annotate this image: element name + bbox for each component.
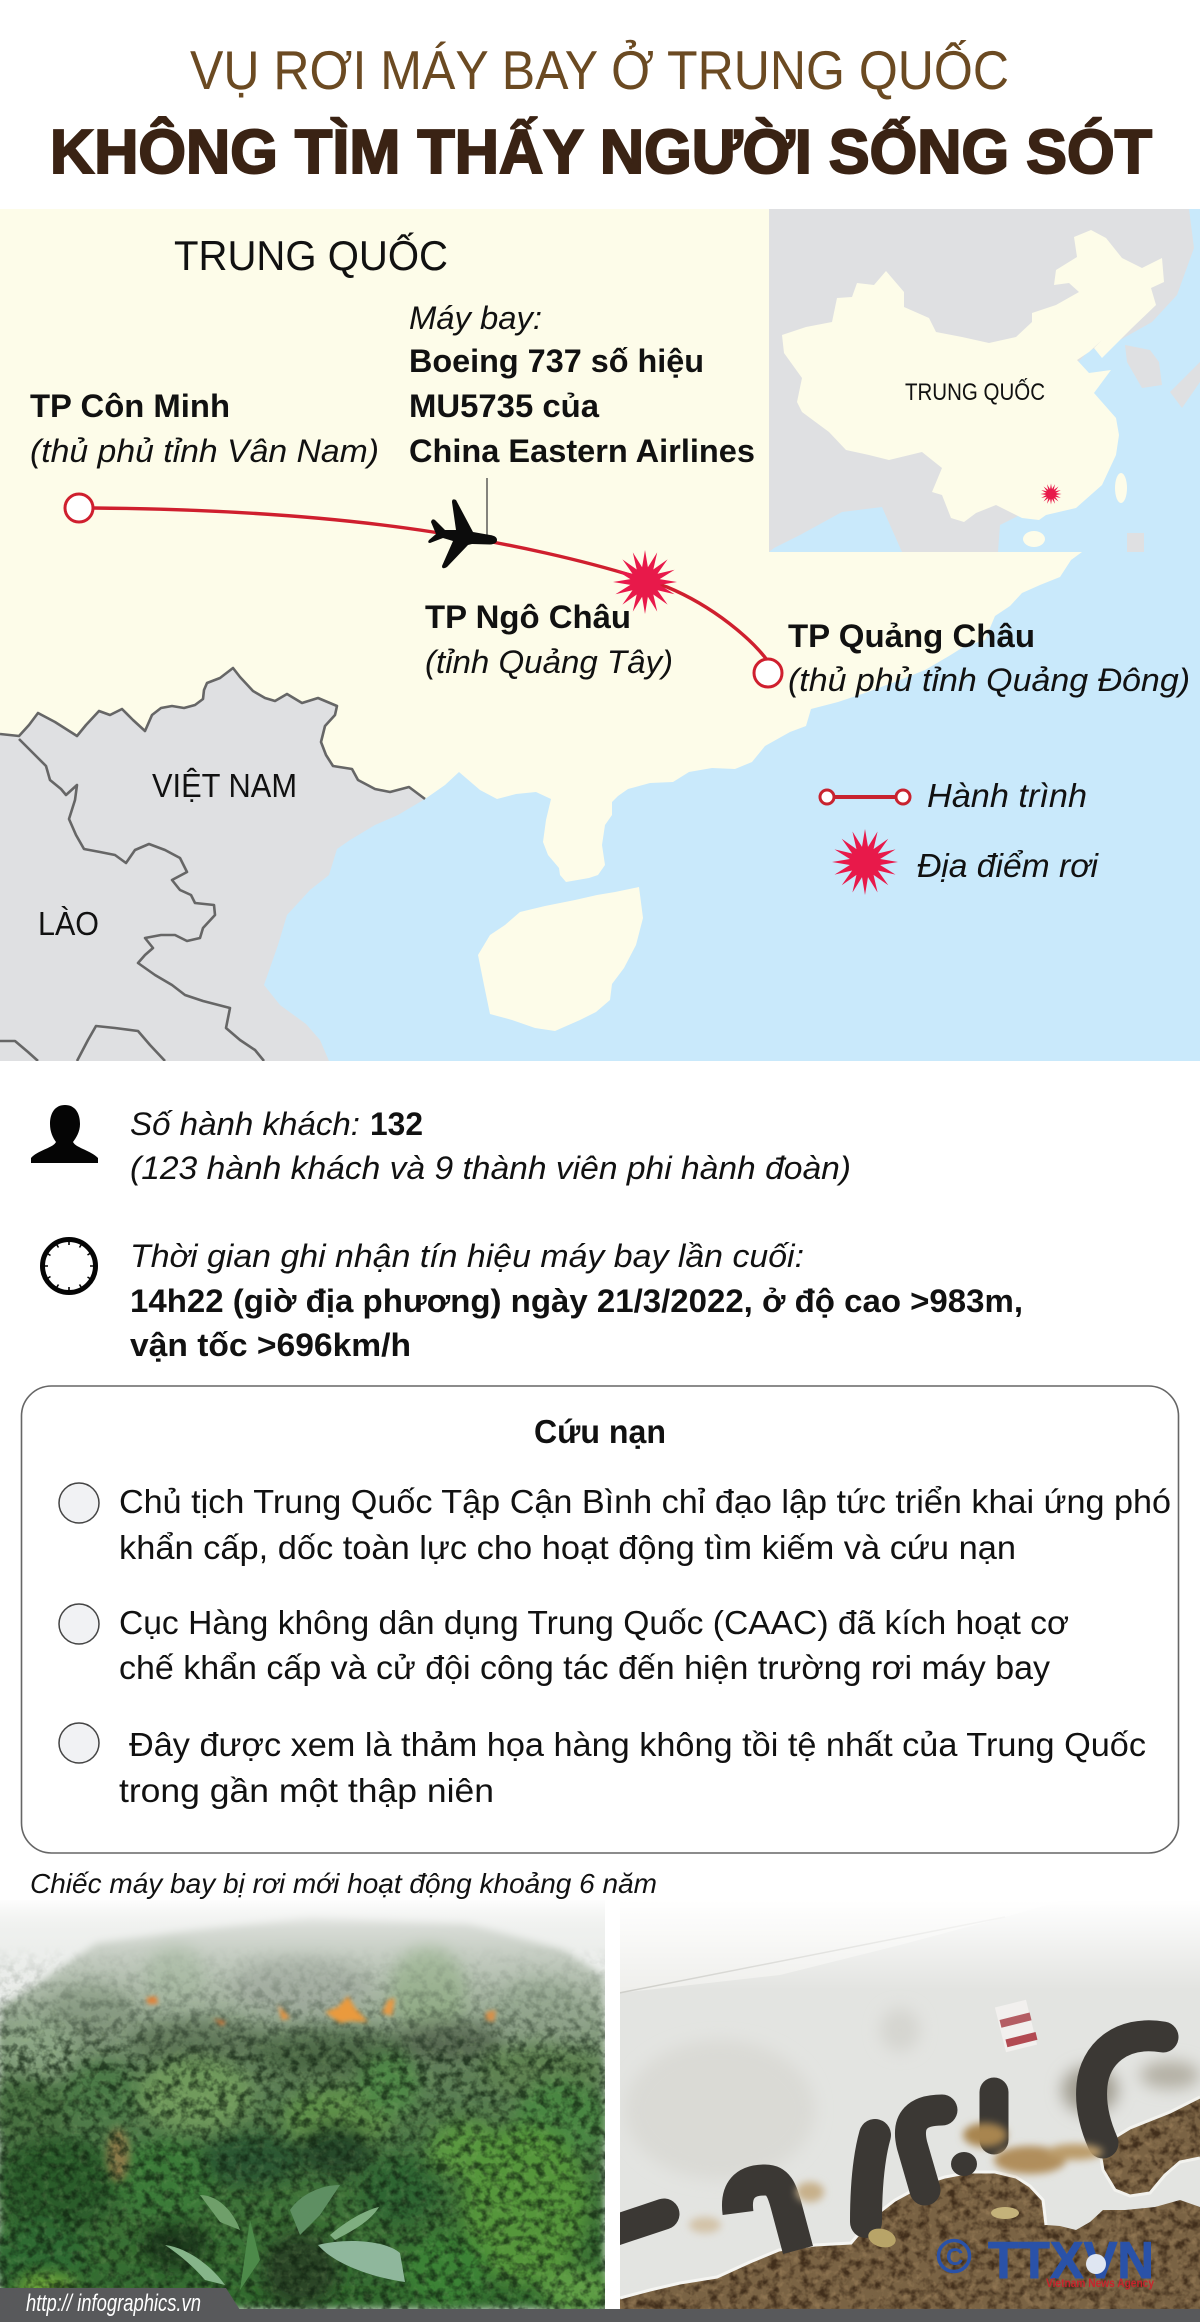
text: Ngô Châu: TP Ngô Châu xyxy=(425,599,631,635)
fuselage panel xyxy=(620,1900,1200,2298)
title line 1: VỤ RƠI MÁY BAY Ở TRUNG QUỐC xyxy=(190,39,1009,101)
logo: TTXVN: TTXVN xyxy=(988,2232,1154,2290)
sticker xyxy=(995,2000,1037,2052)
panel edge highlight xyxy=(620,2172,1046,2298)
item 2: Cục Hàng không dân dụng Trung Quốc (CAAC) đã kích hoạt cơ xyxy=(119,1604,1069,1641)
panel rivet seam xyxy=(619,1917,1005,1993)
label: Việt Nam: VIỆT NAM xyxy=(152,767,297,804)
panel: rescue xyxy=(22,1386,1178,1853)
text: Côn Minh: TP Côn Minh xyxy=(30,388,230,424)
upper panel xyxy=(619,1900,1065,1993)
last signal info xyxy=(42,1238,1023,1363)
title xyxy=(50,39,1152,187)
photo: aircraft wreckage xyxy=(610,1900,1200,2309)
heading: rescue: Cứu nạn xyxy=(534,1413,666,1450)
flight route line xyxy=(93,508,767,660)
leader line xyxy=(486,478,488,536)
signal text: 14h22 (giờ địa phương) ngày 21/3/2022, ở độ cao >983m, xyxy=(130,1283,1023,1319)
rust stains xyxy=(689,2123,1103,2233)
icon: clock xyxy=(42,1240,96,1292)
livery lettering xyxy=(610,2036,1163,2250)
legend: crash site xyxy=(832,829,1100,895)
tree canopies xyxy=(0,1945,611,2314)
legend: crash site: Địa điểm rơi xyxy=(917,847,1100,884)
icon: person xyxy=(31,1105,98,1163)
text: aircraft details xyxy=(409,300,755,469)
text: aircraft details: MU5735 của xyxy=(409,388,599,424)
label: Trung Quốc: TRUNG QUỐC xyxy=(905,378,1045,406)
item 3 xyxy=(59,1723,1146,1809)
foliage texture xyxy=(0,1954,605,2309)
panel soiling xyxy=(625,2008,1200,2180)
item 1: Chủ tịch Trung Quốc Tập Cận Bình chỉ đạo lập tức triển khai ứng phó xyxy=(119,1483,1171,1520)
Taiwan xyxy=(1115,473,1127,503)
signal text xyxy=(130,1238,1023,1363)
passenger text: 132 xyxy=(370,1106,423,1142)
title line 2: KHÔNG TÌM THẤY NGƯỜI SỐNG SÓT xyxy=(50,118,1152,187)
passenger text: (123 hành khách và 9 thành viên phi hành đoàn) xyxy=(130,1150,851,1186)
item 2 xyxy=(59,1604,1069,1686)
item 1 xyxy=(59,1483,1171,1566)
item 3: trong gần một thập niên xyxy=(119,1772,494,1809)
lettering dot xyxy=(951,2152,977,2176)
signal text: Thời gian ghi nhận tín hiệu máy bay lần cuối: xyxy=(130,1238,804,1274)
passenger text: Số hành khách: xyxy=(130,1106,360,1142)
passenger info xyxy=(31,1105,851,1186)
border lines xyxy=(0,668,425,1061)
text: Côn Minh xyxy=(30,388,379,469)
text: aircraft details: Máy bay: xyxy=(409,300,542,336)
label: Lào: LÀO xyxy=(38,905,99,942)
panel: main route map xyxy=(0,209,1200,1061)
photo caption: Chiếc máy bay bị rơi mới hoạt động khoảng 6 năm xyxy=(30,1868,657,1899)
brown patch xyxy=(107,2128,129,2182)
footer bar xyxy=(0,2309,1200,2322)
route start marker xyxy=(65,494,93,522)
text: aircraft details: China Eastern Airlines xyxy=(409,433,755,469)
text: Quảng Châu: TP Quảng Châu xyxy=(788,618,1035,654)
text: Côn Minh: (thủ phủ tỉnh Vân Nam) xyxy=(30,433,379,469)
legend: route xyxy=(818,782,1086,808)
route end marker xyxy=(754,659,782,687)
item 3: Đây được xem là thảm họa hàng không tồi tệ nhất của Trung Quốc xyxy=(129,1726,1146,1763)
land: southern China xyxy=(0,209,1082,882)
fog xyxy=(0,1900,605,2060)
legend: route: Hành trình xyxy=(927,777,1087,814)
text: Quảng Châu xyxy=(788,618,1190,698)
icon: crash site star small xyxy=(1040,483,1062,505)
item 2: chế khẩn cấp và cử đội công tác đến hiện trường rơi máy bay xyxy=(119,1649,1051,1686)
item 1: khẩn cấp, dốc toàn lực cho hoạt động tìm kiếm và cứu nạn xyxy=(119,1529,1016,1566)
panel: China locator inset xyxy=(769,209,1200,552)
sea xyxy=(998,209,1200,552)
land: Vietnam and Laos xyxy=(0,668,425,1061)
logo: TTXVN: Vietnam News Agency xyxy=(1046,2276,1154,2290)
text: Ngô Châu: (tỉnh Quảng Tây) xyxy=(425,644,673,680)
neighbours: Korea and Japan xyxy=(1125,345,1200,552)
China silhouette xyxy=(782,230,1164,522)
icon: crash site star xyxy=(613,550,677,614)
passenger text xyxy=(130,1106,851,1186)
label: Trung Quốc: TRUNG QUỐC xyxy=(174,231,448,279)
text: Ngô Châu xyxy=(425,599,673,680)
icon: plane xyxy=(428,499,497,568)
text: aircraft details: Boeing 737 số hiệu xyxy=(409,343,704,379)
photo: forest crash site xyxy=(0,1900,611,2314)
logo: TTXVN: C xyxy=(946,2244,963,2271)
hillside xyxy=(0,1917,605,2309)
legend xyxy=(820,777,1100,895)
signal text: vận tốc >696km/h xyxy=(130,1327,411,1363)
ground debris xyxy=(620,2098,1200,2309)
Hainan xyxy=(1023,531,1045,547)
leaves on ground xyxy=(866,2226,898,2250)
fire xyxy=(146,1996,496,2026)
banana leaves xyxy=(165,2185,405,2290)
footer url tag: http:// infographics.vn xyxy=(26,2290,201,2317)
top fade xyxy=(620,1900,1200,1990)
text: Quảng Châu: (thủ phủ tỉnh Quảng Đông) xyxy=(788,662,1190,698)
land: Hainan island xyxy=(478,887,643,1031)
